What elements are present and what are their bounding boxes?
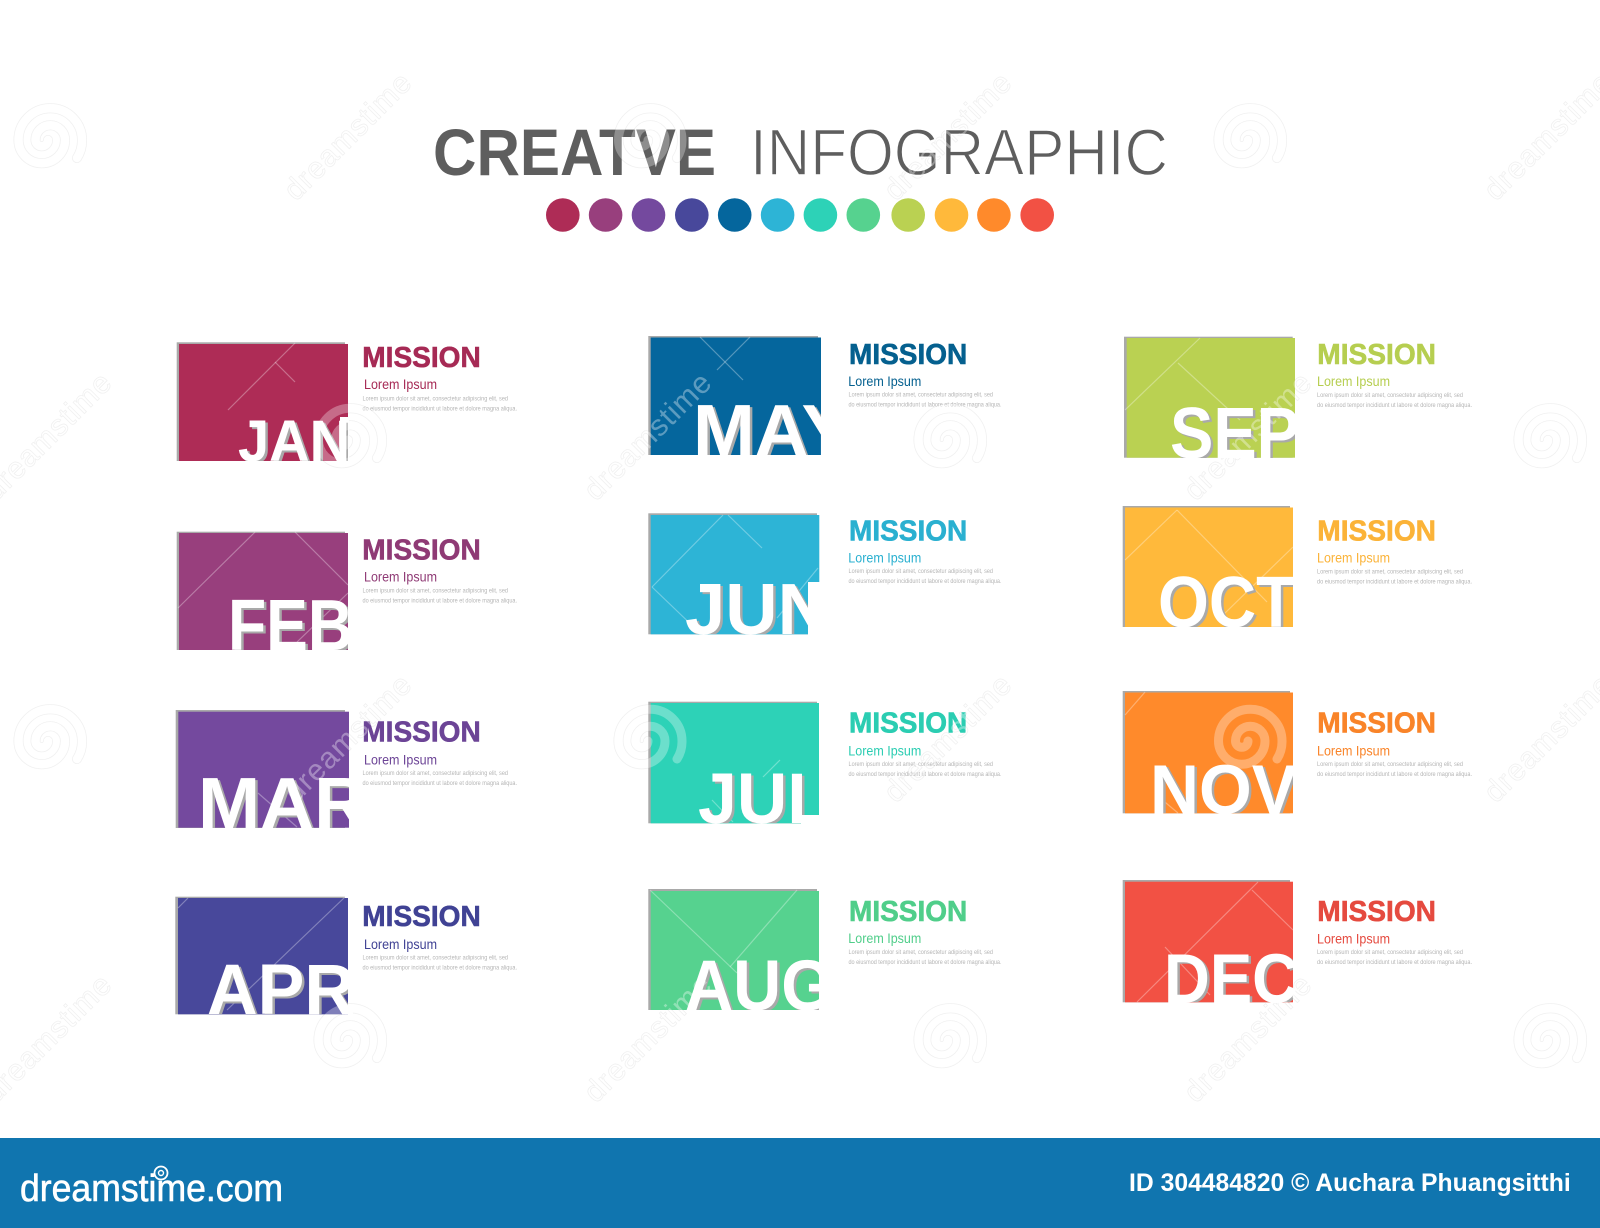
mission text: May: MISSION bbox=[849, 339, 967, 371]
panel: May bbox=[648, 336, 1001, 455]
month label: AUG: AUG bbox=[685, 947, 833, 1026]
panel: March: MAR bbox=[200, 766, 370, 846]
month label: JAN: JAN bbox=[238, 409, 350, 474]
mission text: April: MISSION bbox=[362, 901, 481, 933]
mission text: August: Lorem ipsum dolor sit amet, consectetur adipiscing elit, sed bbox=[848, 949, 993, 956]
mission text: December bbox=[1317, 896, 1472, 966]
panel: August: AUG bbox=[688, 949, 836, 1028]
mission text: September bbox=[1317, 339, 1472, 409]
panel: July: JUL bbox=[700, 762, 832, 841]
watermark base layer: faint spirals and diagonal words on the white background: dreamstime bbox=[1178, 968, 1319, 1109]
mission text: January: Lorem ipsum dolor sit amet, consectetur adipiscing elit, sed bbox=[362, 396, 508, 402]
watermark base layer: faint spirals and diagonal words on the white background: dreamstime bbox=[278, 66, 419, 207]
watermark overlay: translucent white spirals and diagonal words over the panels: dreamstime bbox=[278, 668, 419, 809]
mission text: December: Lorem ipsum dolor sit amet, consectetur adipiscing elit, sed bbox=[1317, 949, 1464, 956]
mission text: January bbox=[362, 342, 517, 413]
mission text: March: Lorem Ipsum bbox=[364, 752, 437, 767]
month label: JUN: JUN bbox=[685, 570, 830, 650]
panel: August bbox=[648, 889, 1001, 1010]
mission text: November bbox=[1317, 708, 1472, 778]
panel: February: FEB bbox=[230, 588, 356, 668]
panel: June bbox=[648, 513, 1001, 634]
month label: DEC: DEC bbox=[1164, 939, 1298, 1017]
mission text: June: do eiusmod tempor incididunt ut labore et dolore magna aliqua. bbox=[848, 578, 1002, 585]
mission text: June: Lorem Ipsum bbox=[848, 550, 921, 565]
mission text: July bbox=[848, 708, 1002, 778]
mission text: February: Lorem ipsum dolor sit amet, consectetur adipiscing elit, sed bbox=[362, 588, 508, 594]
month label: NOV: NOV bbox=[1150, 750, 1297, 828]
panel: January: JAN bbox=[240, 411, 352, 476]
mission text: June: Lorem ipsum dolor sit amet, consectetur adipiscing elit, sed bbox=[848, 568, 993, 575]
mission text: October bbox=[1317, 515, 1472, 585]
watermark base layer: faint spirals and diagonal words on the white background: dreamstime bbox=[578, 968, 719, 1109]
watermark overlay: translucent white spirals and diagonal words over the panels: dreamstime bbox=[878, 66, 1019, 207]
footer logo: dreamstime.com: dreamstime.com bbox=[20, 1168, 283, 1210]
mission text: October: MISSION bbox=[1317, 515, 1436, 547]
panel: November bbox=[1122, 691, 1472, 814]
panel: December bbox=[1122, 880, 1472, 1003]
watermark overlay: translucent white spirals and diagonal words over the panels: dreamstime bbox=[1178, 968, 1319, 1109]
watermark base layer: faint spirals and diagonal words on the white background: dreamstime bbox=[878, 66, 1019, 207]
panel: April bbox=[175, 896, 516, 1014]
mission text: May: Lorem ipsum dolor sit amet, consectetur adipiscing elit, sed bbox=[848, 392, 993, 399]
panel: January bbox=[176, 342, 516, 461]
mission text: September: do eiusmod tempor incididunt ut labore et dolore magna aliqua. bbox=[1317, 402, 1472, 409]
mission text: October: Lorem Ipsum bbox=[1317, 550, 1390, 565]
colour dots row bbox=[546, 198, 1054, 232]
panel: September: SEP bbox=[1172, 396, 1302, 476]
month label: JUL: JUL bbox=[698, 760, 830, 839]
mission text: July: MISSION bbox=[849, 708, 967, 740]
mission text: November: do eiusmod tempor incididunt ut labore et dolore magna aliqua. bbox=[1317, 771, 1472, 778]
mission text: May bbox=[848, 339, 1002, 409]
watermark base layer: faint spirals and diagonal words on the white background: dreamstime bbox=[878, 668, 1019, 809]
mission text: December: MISSION bbox=[1317, 896, 1436, 928]
mission text: October: Lorem ipsum dolor sit amet, consectetur adipiscing elit, sed bbox=[1317, 568, 1464, 575]
watermark overlay: translucent white spirals and diagonal words over the panels: dreamstime bbox=[578, 366, 719, 507]
mission text: March: do eiusmod tempor incididunt ut labore et dolore magna aliqua. bbox=[362, 780, 517, 787]
mission text: June bbox=[848, 515, 1002, 585]
mission text: July: Lorem Ipsum bbox=[848, 744, 921, 759]
footer credit: ID 304484820 © Auchara Phuangsitthi bbox=[1129, 1169, 1571, 1197]
panel: June: JUN bbox=[688, 572, 832, 652]
title: INFOGRAPHIC bbox=[750, 115, 1168, 189]
mission text: April: Lorem Ipsum bbox=[364, 937, 437, 952]
mission text: December: do eiusmod tempor incididunt ut labore et dolore magna aliqua. bbox=[1317, 959, 1472, 966]
month label: SEP: SEP bbox=[1170, 394, 1300, 474]
mission text: February: do eiusmod tempor incididunt ut labore et dolore magna aliqua. bbox=[362, 598, 517, 605]
panel: March bbox=[176, 710, 516, 828]
mission text: January: do eiusmod tempor incididunt ut labore et dolore magna aliqua. bbox=[362, 406, 517, 413]
panel: April: APR bbox=[210, 953, 358, 1032]
mission text: September: MISSION bbox=[1317, 339, 1436, 371]
mission text: March: Lorem ipsum dolor sit amet, consectetur adipiscing elit, sed bbox=[362, 770, 508, 777]
mission text: January: MISSION bbox=[362, 342, 481, 374]
mission text: August: MISSION bbox=[849, 896, 967, 928]
panel: February bbox=[176, 532, 516, 650]
watermark overlay: translucent white spirals and diagonal words over the panels: dreamstime bbox=[878, 668, 1019, 809]
panel: October bbox=[1122, 506, 1472, 627]
mission text: February: Lorem Ipsum bbox=[364, 570, 437, 585]
panel: December: DEC bbox=[1166, 941, 1300, 1019]
panel: September bbox=[1124, 336, 1472, 458]
mission text: March: MISSION bbox=[362, 717, 481, 749]
mission text: April bbox=[362, 901, 517, 972]
month label: APR: APR bbox=[207, 951, 355, 1030]
month label: MAR: MAR bbox=[198, 764, 368, 844]
mission text: August bbox=[848, 896, 1002, 966]
watermark overlay: translucent white spirals and diagonal words over the panels: dreamstime bbox=[278, 66, 419, 207]
watermark base layer: faint spirals and diagonal words on the white background: dreamstime bbox=[1178, 366, 1319, 507]
mission text: November: MISSION bbox=[1317, 708, 1436, 740]
mission text: August: Lorem Ipsum bbox=[848, 931, 921, 946]
panel: November: NOV bbox=[1152, 752, 1300, 830]
mission text: August: do eiusmod tempor incididunt ut labore et dolore magna aliqua. bbox=[848, 959, 1002, 966]
mission text: October: do eiusmod tempor incididunt ut labore et dolore magna aliqua. bbox=[1317, 578, 1472, 585]
month label: FEB: FEB bbox=[228, 586, 353, 666]
month label: MAY: MAY bbox=[693, 391, 851, 471]
mission text: September: Lorem ipsum dolor sit amet, consectetur adipiscing elit, sed bbox=[1317, 392, 1464, 399]
watermark overlay: translucent white spirals and diagonal words over the panels: dreamstime bbox=[1178, 366, 1319, 507]
panel: July bbox=[648, 702, 1001, 824]
mission text: March bbox=[362, 717, 517, 787]
mission text: November: Lorem ipsum dolor sit amet, consectetur adipiscing elit, sed bbox=[1317, 761, 1464, 768]
watermark overlay: translucent white spirals and diagonal words over the panels: dreamstime bbox=[578, 968, 719, 1109]
panel: October: OCT bbox=[1160, 565, 1299, 645]
mission text: June: MISSION bbox=[849, 515, 967, 547]
mission text: February: MISSION bbox=[362, 534, 481, 566]
title bbox=[433, 115, 1168, 189]
watermark base layer: faint spirals and diagonal words on the white background: dreamstime bbox=[278, 668, 419, 809]
mission text: April: do eiusmod tempor incididunt ut labore et dolore magna aliqua. bbox=[362, 965, 517, 972]
mission text: January: Lorem Ipsum bbox=[364, 377, 437, 392]
footer bar bbox=[0, 1138, 1600, 1228]
panel: May: MAY bbox=[696, 393, 854, 473]
title: CREATVE bbox=[433, 115, 716, 189]
mission text: September: Lorem Ipsum bbox=[1317, 374, 1390, 389]
mission text: May: Lorem Ipsum bbox=[848, 374, 921, 389]
mission text: July: do eiusmod tempor incididunt ut labore et dolore magna aliqua. bbox=[848, 771, 1002, 778]
mission text: July: Lorem ipsum dolor sit amet, consectetur adipiscing elit, sed bbox=[848, 761, 993, 768]
mission text: May: do eiusmod tempor incididunt ut labore et dolore magna aliqua. bbox=[848, 402, 1002, 409]
mission text: April: Lorem ipsum dolor sit amet, consectetur adipiscing elit, sed bbox=[362, 954, 508, 962]
mission text: February bbox=[362, 534, 517, 605]
mission text: November: Lorem Ipsum bbox=[1317, 743, 1390, 758]
watermark base layer: faint spirals and diagonal words on the white background: dreamstime bbox=[578, 366, 719, 507]
month label: OCT: OCT bbox=[1158, 563, 1296, 643]
mission text: December: Lorem Ipsum bbox=[1317, 931, 1390, 946]
